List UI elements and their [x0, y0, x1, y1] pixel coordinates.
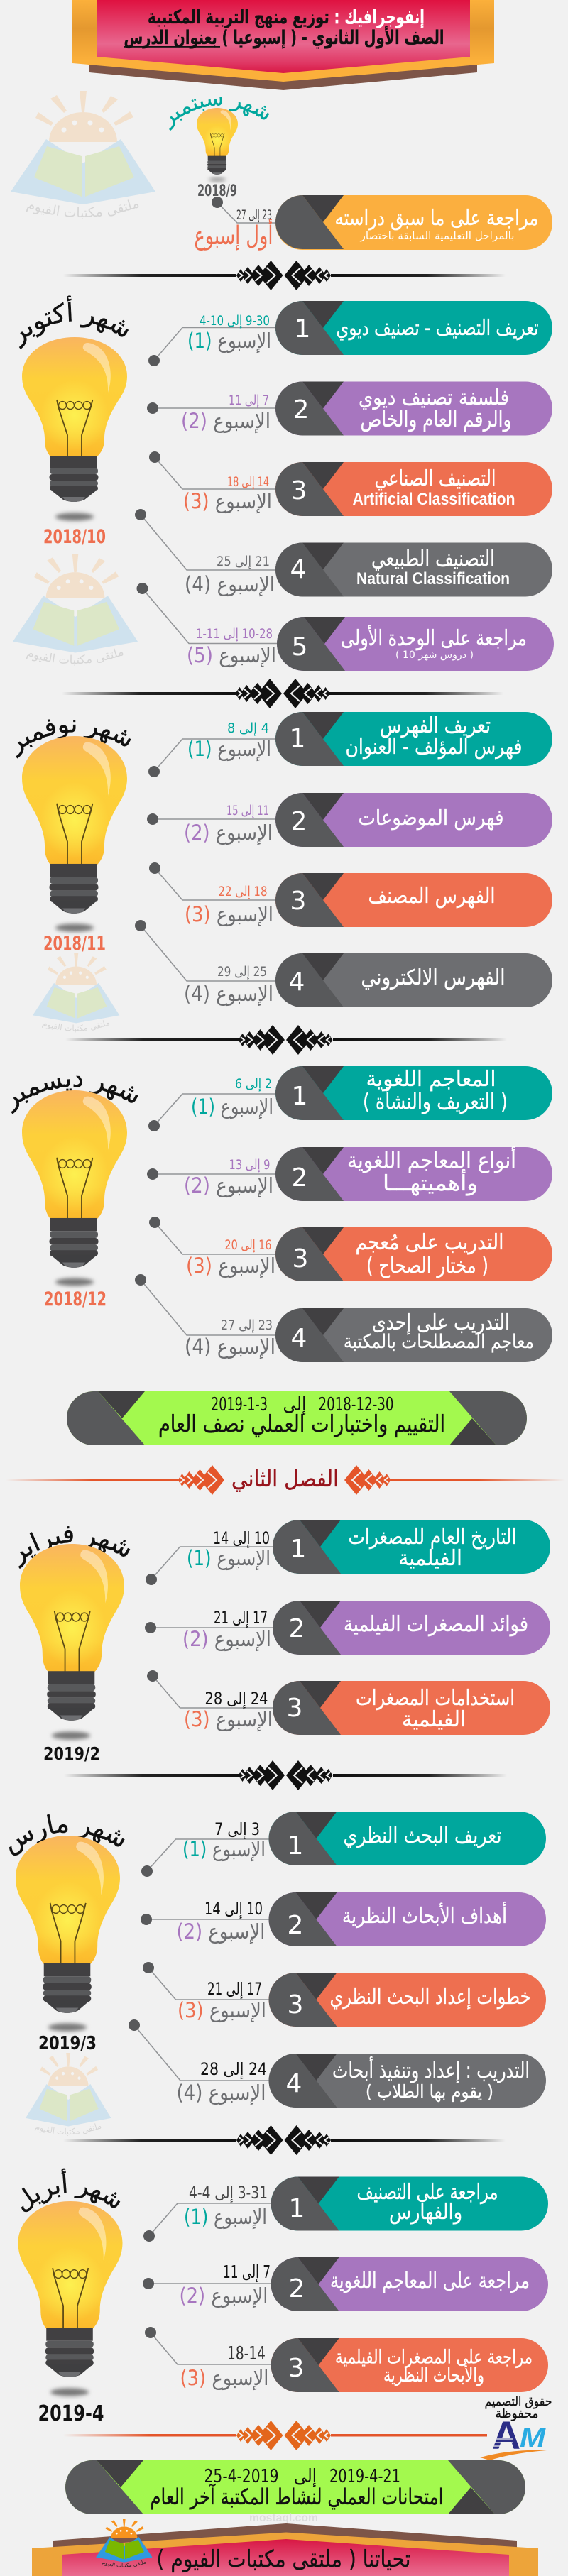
divider: [63, 2421, 487, 2450]
week 3 label: الإسبوع (3): [184, 1707, 273, 1732]
connector 1: [143, 2203, 271, 2242]
month date: 2019/3: [38, 2033, 97, 2054]
week 3 label: الإسبوع (3): [185, 902, 273, 927]
date 1: 3-31 إلى 4-4: [189, 2183, 268, 2203]
week 4 label: الإسبوع (4): [185, 572, 275, 597]
pill 2: 2: [291, 807, 307, 836]
pill 4: [268, 2054, 546, 2108]
week 3 label: الإسبوع (3): [178, 1998, 266, 2023]
pill 5: [277, 617, 554, 671]
icon: light bulb: [20, 1544, 124, 1721]
date range: 23 إلى 27: [236, 207, 272, 224]
week 3 label: الإسبوع (3): [183, 489, 272, 514]
watermark logo: March: ملتقى مكتبات الفيوم: [35, 2123, 101, 2136]
bulb shadow: [52, 1732, 90, 1739]
panel: April: [18, 2168, 548, 2426]
pill 3: الفيلمية: [402, 1707, 466, 1732]
pill 1: [271, 2176, 548, 2230]
month date: 2018/10: [43, 526, 106, 548]
date 1: 2 إلى 6: [235, 1076, 272, 1092]
week 4 label: الإسبوع (4): [185, 1334, 275, 1359]
pill 1: [275, 712, 552, 766]
copyright note: محفوظة: [496, 2406, 538, 2421]
logo: Fayoum libraries forum: ملتقى مكتبات الفيوم: [102, 2560, 146, 2568]
pill 1: [275, 301, 552, 355]
pill 2: والرقم العام والخاص: [361, 407, 511, 432]
icon: light bulb: [22, 337, 127, 502]
connector 1: [148, 739, 275, 777]
pill 3: التصنيف الصناعي: [375, 466, 496, 491]
bulb shadow: [50, 2388, 89, 2396]
pill 3: التدريب على مُعجم: [355, 1230, 504, 1255]
pill 1: 1: [290, 1535, 306, 1564]
date 1: 4 إلى 8: [227, 720, 269, 737]
connector 1: [148, 1094, 275, 1131]
panel: February: [18, 1520, 550, 1764]
pill 4: معاجم المصطلحات بالمكتبة: [344, 1331, 534, 1353]
month date: 2019-4: [38, 2401, 104, 2426]
divider: [63, 261, 506, 290]
pill 1: تعريف البحث النظري: [344, 1824, 501, 1848]
pill 2: 2: [289, 1614, 305, 1643]
connector 3: [149, 451, 275, 489]
week 2 label: الإسبوع (2): [176, 1919, 266, 1944]
date 1: 10 إلى 14: [213, 1528, 270, 1549]
pill 3: 3: [288, 2354, 304, 2383]
connector 2: [143, 2278, 271, 2289]
pill 3: [275, 873, 552, 927]
icon: light bulb: [197, 108, 238, 175]
bulb shadow: [55, 924, 94, 931]
copyright note: [484, 2394, 552, 2421]
bulb shadow: [55, 513, 94, 521]
panel: October: [18, 295, 554, 671]
pill 4: Natural Classification: [356, 569, 510, 588]
pill 2: أنواع المعاجم اللغوية: [347, 1146, 516, 1173]
pill 3: الفهرس المصنف: [368, 884, 496, 909]
copyright note: حقوق التصميم: [484, 2394, 552, 2409]
icon: AM designer logo: M: [520, 2423, 547, 2453]
date 2: 7 إلى 11: [223, 2262, 271, 2283]
week 3 label: الإسبوع (3): [186, 1254, 275, 1278]
pill 3: والأبحاث النظرية: [383, 2362, 484, 2386]
connector 3: [145, 2327, 271, 2364]
pill 5: مراجعة على الوحدة الأولى: [341, 624, 527, 651]
pill: review: بالمراحل التعليمية السابقة باختصار: [359, 229, 514, 242]
pill 3: 3: [291, 476, 307, 505]
pill 1: المعاجم اللغوية: [366, 1067, 496, 1092]
week 4 label: الإسبوع (4): [184, 982, 273, 1007]
pill 2: فوائد المصغرات الفيلمية: [344, 1612, 528, 1637]
icon: light bulb: [18, 2201, 122, 2377]
week 2 label: الإسبوع (2): [179, 2284, 268, 2308]
month title: September: شهر سبتمبر: [169, 97, 270, 131]
final exams pill: امتحانات العملي لنشاط المكتبة آخر العام: [151, 2483, 443, 2510]
midyear evaluation pill: [67, 1391, 527, 1445]
connector 4: [129, 2019, 268, 2081]
pill 4: [275, 1308, 552, 1362]
week 1 label: الإسبوع (1): [187, 737, 271, 762]
month title: April: شهر أبريل: [21, 2168, 121, 2212]
week 1 label: الإسبوع (1): [184, 2205, 267, 2230]
connector 2: [147, 402, 275, 414]
pill 1: [268, 1812, 546, 1865]
pill 4: 4: [291, 1324, 307, 1353]
pill 4: [275, 953, 552, 1007]
connector: [212, 197, 275, 223]
pill 2: [271, 2257, 548, 2311]
pill 1: [275, 1066, 552, 1120]
week label: أول إسبوع: [195, 219, 273, 251]
pill 1: 1: [289, 2194, 305, 2223]
connector 2: [147, 813, 275, 825]
pill 1: ( التعريف والنشأة ): [363, 1086, 508, 1114]
logo: Fayoum libraries forum: [96, 2519, 152, 2568]
month date: 2018/11: [43, 933, 106, 955]
connector 1: [141, 1839, 268, 1877]
watermark logo: October: ملتقى مكتبات الفيوم: [26, 649, 124, 666]
pill 1: 1: [292, 1082, 307, 1111]
final exams pill: 25-4-2019: [204, 2466, 278, 2487]
panel: November: [16, 712, 552, 1007]
date 1: 9-30 إلى 10-4: [200, 313, 270, 329]
pill 3: ( مختار الصحاح ): [366, 1254, 488, 1278]
pill 1: تعريف الفهرس: [380, 713, 491, 738]
section heading: second term: الفصل الثاني: [231, 1465, 339, 1492]
pill 3: [271, 2338, 548, 2392]
pill 5: ( دروس شهر 10 ): [395, 650, 474, 661]
connector 2: [141, 1914, 268, 1925]
month title: March: شهر مارس: [9, 1814, 125, 1856]
week 2 label: الإسبوع (2): [182, 1627, 271, 1652]
date 4: 25 إلى 29: [217, 964, 267, 980]
date 3: 17 إلى 21: [207, 1979, 262, 2000]
pill 1: 1: [290, 724, 305, 753]
week 2 label: الإسبوع (2): [184, 1173, 273, 1198]
icon: light bulb: [16, 1836, 120, 2013]
watermark logo: November: ملتقى مكتبات الفيوم: [42, 1021, 109, 1032]
week 3 label: الإسبوع (3): [180, 2366, 268, 2391]
footer banner: [32, 2523, 538, 2576]
date 4: 23 إلى 27: [221, 1317, 273, 1334]
pill 3: 3: [290, 887, 306, 916]
connector 4: [135, 509, 275, 570]
connector 3: [147, 1670, 273, 1708]
pill 3: [275, 1227, 552, 1281]
date 2: 7 إلى 11: [229, 393, 269, 409]
panel: September: [169, 97, 552, 251]
final exams pill: إلى: [294, 2466, 317, 2487]
connector 3: [149, 1217, 275, 1254]
connector 3: [143, 1962, 268, 2000]
connector 4: [135, 920, 275, 981]
connector 4: [135, 1274, 275, 1335]
pill 3: [268, 1973, 546, 2027]
panel: December: [11, 1066, 552, 1362]
pill 4: التصنيف الطبيعي: [371, 547, 495, 571]
pill 2: [273, 1601, 550, 1655]
date 3: 18 إلى 22: [219, 884, 267, 900]
connector 1: [146, 1547, 273, 1585]
pill 4: [275, 542, 552, 596]
pill 4: ( يقوم بها الطلاب ): [366, 2081, 493, 2103]
pill 2: 2: [292, 1163, 307, 1193]
pill 1: [273, 1520, 550, 1574]
icon: light bulb: [22, 1090, 127, 1268]
pill 4: 4: [289, 968, 305, 997]
pill 1: والفهارس: [389, 2200, 462, 2225]
mostaql watermark: mostaql.com: [249, 2512, 318, 2524]
date 4: 24 إلى 28: [200, 2059, 267, 2080]
date 3: 18-14: [227, 2343, 266, 2364]
pill 2: 2: [289, 2274, 305, 2303]
week 1 label: الإسبوع (1): [187, 329, 271, 353]
section heading: second term: [6, 1465, 565, 1495]
date 2: 10 إلى 14: [204, 1899, 263, 1919]
pill 3: Artificial Classification: [352, 490, 515, 509]
week 1 label: الإسبوع (1): [182, 1837, 266, 1862]
midyear evaluation pill: 2018-12-30: [318, 1394, 393, 1415]
pill 2: [275, 793, 552, 847]
pill 3: استخدامات المصغرات: [356, 1686, 515, 1711]
watermark logo: top: [11, 91, 155, 219]
connector 5: [136, 583, 277, 643]
pill 2: أهداف الأبحاث النظرية: [342, 1901, 507, 1929]
pill 2: 2: [293, 395, 309, 424]
date 3: 24 إلى 28: [204, 1689, 268, 1709]
pill 2: وأهميتهـــا: [383, 1168, 478, 1196]
month title: October: شهر أكتوبر: [18, 295, 129, 349]
final exams pill: [65, 2460, 525, 2514]
pill 2: 2: [288, 1911, 303, 1940]
icon: AM designer logo: A: [492, 2413, 520, 2457]
connector 2: [145, 1622, 273, 1633]
pill 1: الفيلمية: [398, 1546, 462, 1571]
pill 2: [275, 1146, 552, 1201]
pill 3: 3: [288, 1990, 303, 2019]
panel: March: [9, 1812, 546, 2108]
connector 1: [148, 328, 275, 366]
pill 4: التدريب على إحدى: [372, 1310, 510, 1335]
pill 3: [273, 1681, 550, 1735]
midyear evaluation pill: إلى: [283, 1394, 307, 1415]
midyear evaluation pill: التقييم واختبارات العملي نصف العام: [158, 1410, 445, 1437]
pill 3: 3: [287, 1694, 302, 1723]
pill 1: فهرس المؤلف - العنوان: [345, 735, 523, 760]
pill 4: الفهرس الالكتروني: [361, 965, 506, 990]
divider: [63, 2125, 506, 2155]
pill 2: فلسفة تصنيف ديوي: [359, 385, 509, 410]
date 3: 16 إلى 20: [224, 1237, 271, 1254]
month date: 2018/12: [44, 1288, 106, 1310]
week 1 label: الإسبوع (1): [187, 1546, 271, 1571]
divider: [65, 1025, 507, 1055]
divider: [64, 1760, 507, 1790]
pill 3: [275, 462, 552, 516]
pill 1: 1: [295, 314, 310, 344]
month title: November: شهر نوفمبر: [16, 719, 131, 758]
date 5: 10-28 إلى 11-1: [196, 626, 273, 642]
footer banner: تحياتنا ( ملتقى مكتبات الفيوم ): [156, 2545, 410, 2572]
month date: 2018/9: [197, 182, 237, 200]
pill 1: التاريخ العام للمصغرات: [348, 1525, 517, 1550]
bulb shadow: [48, 2023, 87, 2032]
watermark logo: March: [26, 2053, 111, 2136]
bulb shadow: [209, 177, 226, 182]
date 2: 11 إلى 15: [226, 803, 269, 819]
watermark logo: top: ملتقى مكتبات الفيوم: [26, 200, 139, 219]
pill 5: 5: [292, 632, 307, 662]
pill 2: [275, 382, 552, 436]
week 5 label: الإسبوع (5): [187, 643, 276, 668]
pill 4: 4: [286, 2069, 302, 2098]
month title: February: شهر فبراير: [18, 1526, 131, 1569]
date 1: 3 إلى 7: [214, 1819, 260, 1840]
divider: [62, 679, 503, 708]
icon: AM designer logo: [480, 2413, 547, 2460]
pill 2: [268, 1892, 546, 1946]
pill 2: فهرس الموضوعات: [358, 806, 504, 831]
watermark logo: November: [33, 953, 119, 1032]
week 4 label: الإسبوع (4): [176, 2081, 266, 2105]
month title: December: شهر ديسمبر: [11, 1076, 138, 1114]
pill: review: [275, 195, 552, 250]
header banner: الصف الأول الثانوي - ( إسبوعيا ) بعنوان الدرس: [124, 26, 444, 49]
month date: 2019/2: [43, 1743, 100, 1764]
connector 2: [147, 1168, 275, 1180]
watermark logo: October: [13, 554, 138, 666]
pill 1: 1: [288, 1831, 303, 1860]
bulb shadow: [55, 1278, 94, 1286]
final exams pill: 2019-4-21: [329, 2466, 400, 2487]
week 1 label: الإسبوع (1): [191, 1095, 273, 1119]
pill 4: 4: [290, 555, 306, 584]
date 3: 14 إلى 18: [227, 474, 269, 490]
header banner: [72, 0, 494, 90]
connector 3: [149, 862, 275, 900]
week 2 label: الإسبوع (2): [184, 821, 273, 845]
pill 1: مراجعة على التصنيف: [356, 2180, 498, 2205]
pill 3: 3: [293, 1244, 308, 1273]
date 2: 9 إلى 13: [229, 1157, 270, 1173]
header banner: إنفوجرافيك : توزيع منهج التربية المكتبية: [148, 6, 425, 28]
week 2 label: الإسبوع (2): [181, 409, 271, 434]
midyear evaluation pill: 2019-1-3: [211, 1394, 268, 1415]
date 2: 17 إلى 21: [214, 1608, 268, 1628]
date 4: 21 إلى 25: [217, 554, 270, 570]
icon: light bulb: [22, 736, 127, 914]
